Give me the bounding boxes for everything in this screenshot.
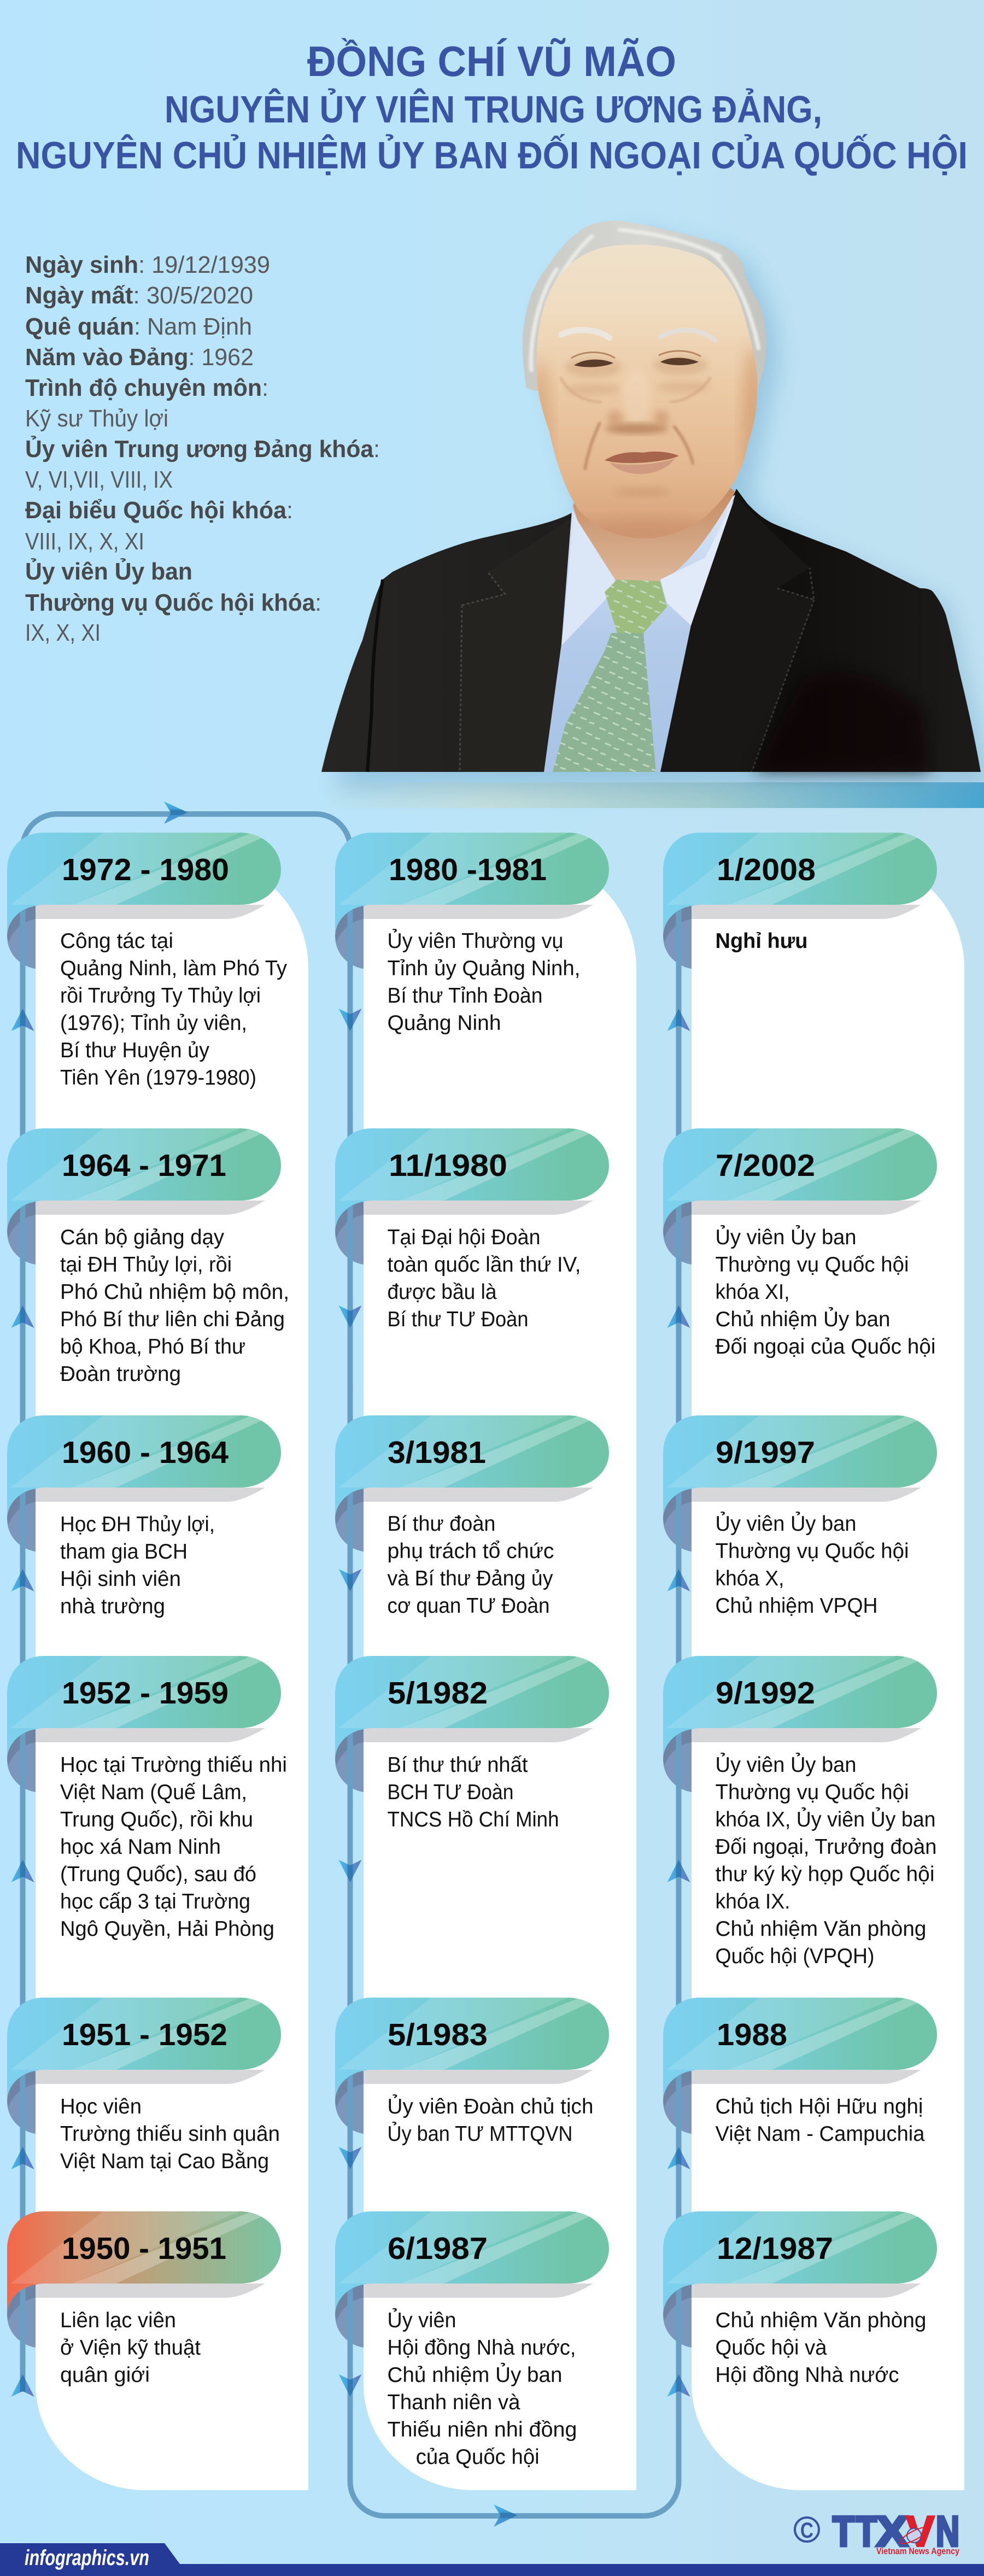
entry: 3/1981: Bí thư đoàn xyxy=(387,1512,495,1536)
entry: 5/1983 xyxy=(335,1987,625,2146)
entry: 9/1997: Ủy viên Ủy ban xyxy=(715,1512,856,1536)
entry: 9/1997 xyxy=(663,1404,953,1618)
entry: 11/1980: toàn quốc lần thứ IV, xyxy=(387,1253,581,1277)
title: NGUYÊN ỦY VIÊN TRUNG ƯƠNG ĐẢNG, xyxy=(165,87,822,131)
entry: 1960 - 1964 xyxy=(7,1404,297,1618)
entry: 5/1982: TNCS Hồ Chí Minh xyxy=(387,1808,559,1831)
entry: 1964 - 1971: Cán bộ giảng dạy xyxy=(60,1226,224,1249)
entry: 9/1992: Chủ nhiệm Văn phòng xyxy=(715,1917,926,1941)
entry: 1952 - 1959: 1952 - 1959 xyxy=(62,1676,229,1711)
entry: 6/1987 xyxy=(335,2200,625,2469)
entry: 1964 - 1971: Phó Chủ nhiệm bộ môn, xyxy=(60,1280,289,1304)
entry: 1972 - 1980: 1972 - 1980 xyxy=(62,852,229,887)
text block: biography facts: Thường vụ Quốc hội khóa: xyxy=(25,589,321,616)
text block: biography facts: Ngày mất: 30/5/2020 xyxy=(25,282,253,309)
entry: 1980 - 1981: 1980 -1981 xyxy=(389,852,547,887)
entry: 1951 - 1952 xyxy=(7,1987,297,2173)
logo: TTXVN copyright: Vietnam News Agency xyxy=(876,2546,959,2556)
logo: TTXVN copyright: C xyxy=(800,2519,813,2543)
entry: 1952 - 1959: học cấp 3 tại Trường xyxy=(60,1890,250,1913)
entry: 9/1997: Thường vụ Quốc hội xyxy=(715,1539,909,1563)
entry: 9/1992: Đối ngoại, Trưởng đoàn xyxy=(715,1835,937,1859)
entry: 1960 - 1964: nhà trường xyxy=(60,1595,165,1618)
footer tab with site name: infographics.vn xyxy=(25,2546,149,2570)
entry: 1972 - 1980: Tiên Yên (1979-1980) xyxy=(60,1066,256,1090)
entry: 6/1987: Thanh niên và xyxy=(387,2391,520,2414)
entry: 1980 - 1981: Ủy viên Thường vụ xyxy=(387,929,563,953)
entry: 6/1987: Hội đồng Nhà nước, xyxy=(387,2336,576,2360)
text block: biography facts: Đại biểu Quốc hội khóa: xyxy=(25,497,293,524)
entry: 9/1992: khóa IX, Ủy viên Ủy ban xyxy=(715,1807,936,1831)
entry: 1972 - 1980: rồi Trưởng Ty Thủy lợi xyxy=(60,984,261,1008)
text block: biography facts: IX, X, XI xyxy=(25,619,101,646)
entry: 9/1992 xyxy=(663,1645,953,1968)
entry: 1950 - 1951 xyxy=(7,2211,281,2386)
entry: 7/2002: 7/2002 xyxy=(716,1148,815,1183)
entry: 9/1992: khóa IX. xyxy=(715,1890,790,1913)
footer tab with site name xyxy=(0,2543,180,2576)
entry: 3/1981: cơ quan TƯ Đoàn xyxy=(387,1594,550,1618)
entry: 9/1992: Ủy viên Ủy ban xyxy=(715,1753,856,1777)
entry: 6/1987: Chủ nhiệm Ủy ban xyxy=(387,2363,562,2387)
text block: biography facts: Ngày sinh: 19/12/1939 xyxy=(25,251,270,278)
logo: TTXVN copyright: T xyxy=(833,2507,854,2555)
logo: TTXVN copyright: T xyxy=(856,2507,877,2555)
entry: 1972 - 1980: Công tác tại xyxy=(60,929,173,953)
entry: 6/1987: Ủy viên xyxy=(387,2308,456,2332)
card panel: right column xyxy=(692,858,964,2490)
title: ĐỒNG CHÍ VŨ MÃO xyxy=(307,37,676,85)
entry: 9/1992: Quốc hội (VPQH) xyxy=(715,1945,875,1968)
text block: biography facts: Quê quán: Nam Định xyxy=(25,313,252,340)
entry: 6/1987: của Quốc hội xyxy=(416,2445,540,2469)
text block: biography facts: Năm vào Đảng: 1962 xyxy=(25,344,254,371)
entry: 1/2008 xyxy=(663,822,953,953)
entry: 1972 - 1980: Quảng Ninh, làm Phó Ty xyxy=(60,957,287,980)
entry: 11/1980: Bí thư TƯ Đoàn xyxy=(387,1308,528,1331)
entry: 1972 - 1980 xyxy=(7,822,297,1090)
entry: 1960 - 1964: tham gia BCH xyxy=(60,1540,188,1564)
entry: 5/1982 xyxy=(335,1645,625,1831)
entry: 1951 - 1952: 1951 - 1952 xyxy=(62,2017,227,2052)
entry: 11/1980 xyxy=(335,1117,625,1331)
footer bar xyxy=(0,2564,984,2576)
entry: 1972 - 1980: Bí thư Huyện ủy xyxy=(60,1039,209,1062)
entry: 1952 - 1959: (Trung Quốc), sau đó xyxy=(60,1863,256,1886)
entry: 7/2002: Ủy viên Ủy ban xyxy=(715,1225,856,1249)
text block: biography facts: V, VI,VII, VIII, IX xyxy=(25,466,173,493)
entry: 7/2002 xyxy=(663,1117,953,1359)
entry: 1950 - 1951: ở Viện kỹ thuật xyxy=(60,2336,201,2360)
text block: biography facts: Ủy viên Ủy ban xyxy=(25,557,192,585)
entry: 1988: 1988 xyxy=(717,2017,787,2052)
entry: 5/1982: 5/1982 xyxy=(388,1676,488,1711)
entry: 1964 - 1971: Đoàn trường xyxy=(60,1362,181,1386)
entry: 6/1987: 6/1987 xyxy=(388,2231,488,2266)
entry: 1964 - 1971: bộ Khoa, Phó Bí thư xyxy=(60,1335,245,1359)
entry: 1952 - 1959: Ngô Quyền, Hải Phòng xyxy=(60,1917,274,1941)
entry: 9/1992: 9/1992 xyxy=(716,1676,815,1711)
entry: 11/1980: được bầu là xyxy=(387,1280,497,1304)
entry: 12/1987: Hội đồng Nhà nước xyxy=(715,2363,899,2387)
entry: 5/1983: 5/1983 xyxy=(388,2017,488,2052)
entry: 1952 - 1959 xyxy=(7,1645,297,1941)
entry: 3/1981: phụ trách tổ chức xyxy=(387,1539,554,1563)
entry: 1980 - 1981 xyxy=(335,822,625,1035)
logo: TTXVN copyright: N xyxy=(936,2507,959,2555)
portrait of Vũ Mão xyxy=(321,221,981,772)
entry: 3/1981: 3/1981 xyxy=(388,1435,486,1470)
entry: 5/1983: Ủy viên Đoàn chủ tịch xyxy=(387,2094,594,2118)
entry: 11/1980: 11/1980 xyxy=(389,1148,507,1183)
entry: 1980 - 1981: Tỉnh ủy Quảng Ninh, xyxy=(387,957,581,980)
entry: 11/1980: Tại Đại hội Đoàn xyxy=(387,1226,540,1249)
band under portrait xyxy=(328,782,984,808)
entry: 9/1997: khóa X, xyxy=(715,1567,784,1590)
entry: 7/2002: khóa XI, xyxy=(715,1280,789,1304)
entry: 12/1987 xyxy=(663,2200,953,2387)
entry: 1951 - 1952: Học viên xyxy=(60,2095,142,2118)
entry: 1988 xyxy=(663,1987,953,2146)
entry: 12/1987: Quốc hội và xyxy=(715,2336,827,2360)
entry: 7/2002: Đối ngoại của Quốc hội xyxy=(715,1335,936,1359)
timeline arrows xyxy=(11,801,690,2527)
text block: biography facts: Trình độ chuyên môn: xyxy=(25,374,268,401)
entry: 7/2002: Chủ nhiệm Ủy ban xyxy=(715,1307,890,1331)
entry: 1972 - 1980: (1976); Tỉnh ủy viên, xyxy=(60,1011,247,1035)
entry: 1/2008: Nghỉ hưu xyxy=(715,929,808,953)
text block: biography facts: Kỹ sư Thủy lợi xyxy=(25,405,168,432)
entry: 1980 - 1981: Bí thư Tỉnh Đoàn xyxy=(387,984,542,1008)
entry: 1952 - 1959: Việt Nam (Quế Lâm, xyxy=(60,1781,247,1804)
entry: 1952 - 1959: Học tại Trường thiếu nhi xyxy=(60,1753,287,1777)
entry: 12/1987: 12/1987 xyxy=(717,2231,833,2266)
entry: 3/1981 xyxy=(335,1404,625,1618)
entry: 1964 - 1971: Phó Bí thư liên chi Đảng xyxy=(60,1308,285,1331)
entry: 1964 - 1971 xyxy=(7,1117,297,1386)
card panel: middle column xyxy=(364,858,636,2490)
text block: biography facts: VIII, IX, X, XI xyxy=(25,528,144,555)
entry: 12/1987: Chủ nhiệm Văn phòng xyxy=(715,2309,926,2332)
portrait shadow xyxy=(335,234,984,790)
entry: 1980 - 1981: Quảng Ninh xyxy=(387,1011,501,1035)
entry: 3/1981: và Bí thư Đảng ủy xyxy=(387,1567,553,1590)
entry: 1/2008: 1/2008 xyxy=(717,852,816,887)
entry: 1960 - 1964: Hội sinh viên xyxy=(60,1567,181,1591)
entry: 1951 - 1952: Việt Nam tại Cao Bằng xyxy=(60,2150,269,2173)
entry: 6/1987: Thiếu niên nhi đồng xyxy=(387,2418,577,2442)
entry: 1950 - 1951: Liên lạc viên xyxy=(60,2309,176,2332)
entry: 5/1982: Bí thư thứ nhất xyxy=(387,1753,528,1777)
entry: 1950 - 1951: quân giới xyxy=(60,2363,150,2387)
entry: 9/1992: Thường vụ Quốc hội xyxy=(715,1781,909,1804)
entry: 1952 - 1959: Trung Quốc), rồi khu xyxy=(60,1808,253,1831)
entry: 5/1983: Ủy ban TƯ MTTQVN xyxy=(387,2122,573,2146)
entry: 5/1982: BCH TƯ Đoàn xyxy=(387,1781,514,1804)
logo: TTXVN copyright xyxy=(795,2507,959,2556)
entry: 1960 - 1964: Học ĐH Thủy lợi, xyxy=(60,1513,215,1536)
entry: 1988: Chủ tịch Hội Hữu nghị xyxy=(715,2095,923,2118)
entry: 9/1992: thư ký kỳ họp Quốc hội xyxy=(715,1863,935,1886)
entry: 1960 - 1964: 1960 - 1964 xyxy=(62,1435,229,1470)
ribbon folds and shadows xyxy=(7,905,921,2347)
card panel: left column xyxy=(36,858,308,2490)
timeline connector line xyxy=(23,814,679,2516)
entry: 1950 - 1951: 1950 - 1951 xyxy=(62,2231,226,2266)
entry: 1964 - 1971: tại ĐH Thủy lợi, rồi xyxy=(60,1253,232,1277)
logo: TTXVN copyright: X xyxy=(876,2507,908,2555)
text block: biography facts: Ủy viên Trung ương Đảng khóa: xyxy=(25,435,380,462)
title xyxy=(16,37,968,177)
entry: 1952 - 1959: học xá Nam Ninh xyxy=(60,1835,221,1859)
entry: 1988: Việt Nam - Campuchia xyxy=(715,2122,925,2146)
entry: 7/2002: Thường vụ Quốc hội xyxy=(715,1253,909,1277)
entry: 9/1997: 9/1997 xyxy=(716,1435,815,1470)
entry: 9/1997: Chủ nhiệm VPQH xyxy=(715,1594,878,1618)
text block: biography facts xyxy=(25,251,380,646)
entry: 1951 - 1952: Trường thiếu sinh quân xyxy=(60,2122,280,2146)
entry: 1964 - 1971: 1964 - 1971 xyxy=(62,1148,226,1183)
logo: TTXVN copyright: V xyxy=(906,2507,934,2555)
